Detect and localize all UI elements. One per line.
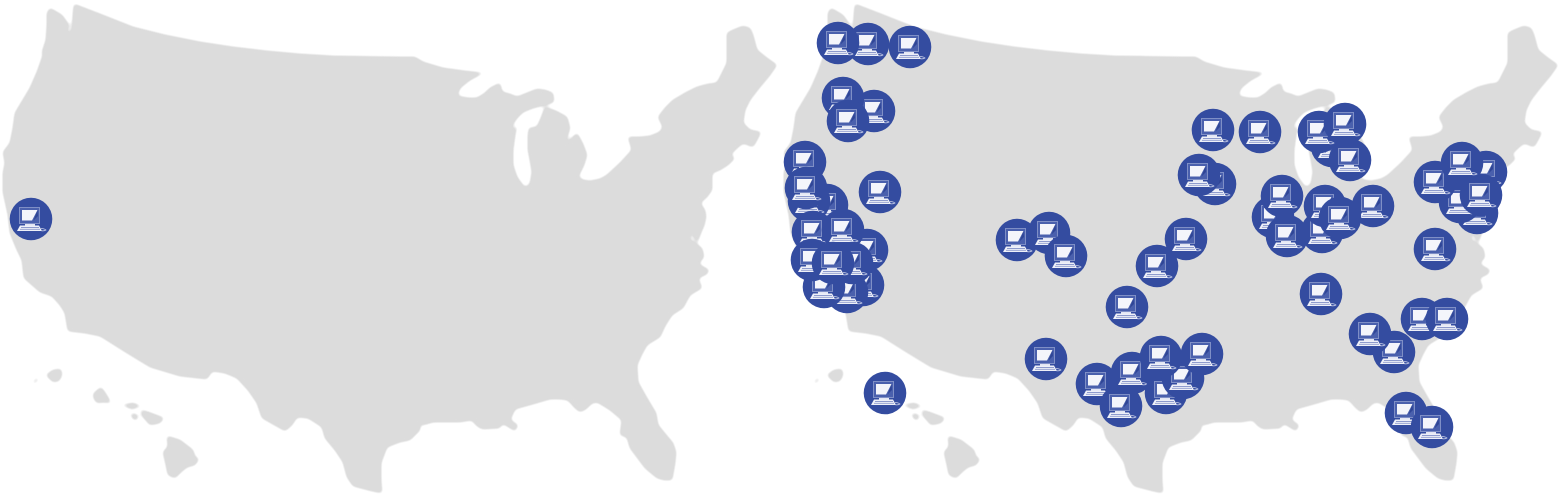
land: left US silhouette bbox=[3, 4, 777, 493]
marker group: Midwest bbox=[1178, 103, 1394, 315]
marker group: Mountain and Plains bbox=[996, 212, 1207, 380]
marker: Hawaii bbox=[864, 372, 906, 414]
marker group: Southeast bbox=[1349, 298, 1468, 448]
marker group: Pacific Northwest bbox=[817, 22, 931, 142]
marker group: Northeast bbox=[1414, 142, 1507, 270]
marker group: California bbox=[784, 141, 901, 313]
marker: California bbox=[10, 198, 52, 240]
map: left, single computer bbox=[3, 4, 777, 493]
map: right, many computers bbox=[784, 4, 1558, 493]
marker group: Texas bbox=[1076, 333, 1223, 427]
land: right US silhouette bbox=[784, 4, 1558, 493]
